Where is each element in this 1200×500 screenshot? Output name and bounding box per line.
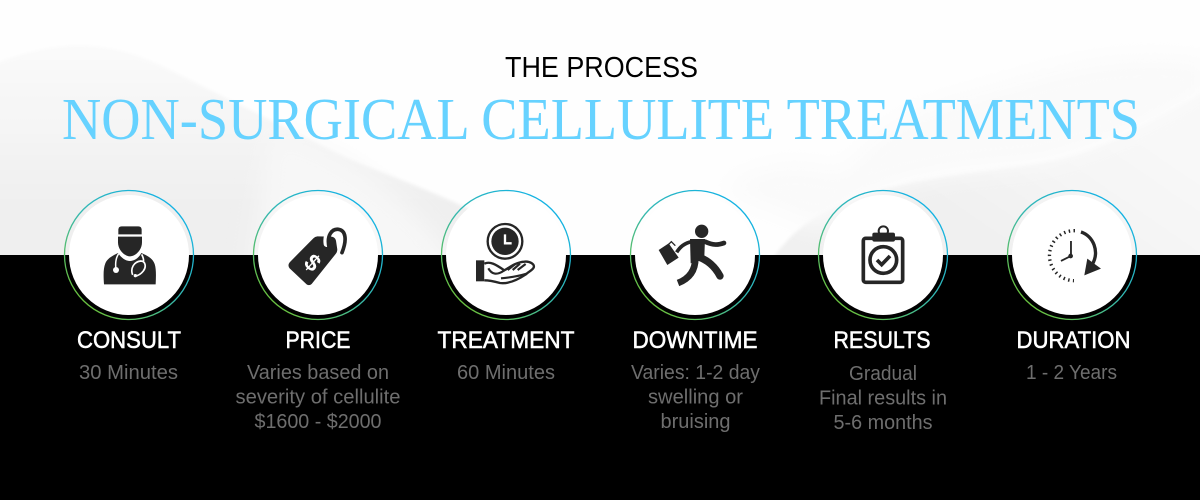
- text: downtime detail: bruising: [660, 411, 730, 433]
- icon: clock with arrow: [1049, 231, 1101, 281]
- step: duration: [1008, 190, 1136, 384]
- heading: results: RESULTS: [834, 327, 930, 354]
- heading: consult: CONSULT: [77, 327, 181, 354]
- icon: clock over hand: [476, 224, 534, 283]
- text: results detail: 5-6 months: [834, 412, 932, 434]
- text: results detail: Gradual: [849, 363, 917, 385]
- background: white silk texture: [0, 0, 1200, 280]
- text: downtime detail: swelling or: [648, 386, 743, 408]
- black lower band: [0, 255, 1200, 500]
- icon: clipboard with check: [863, 226, 903, 282]
- title: non-surgical cellulite treatments: NON-SURGICAL CELLULITE TREATMENTS: [62, 86, 1140, 152]
- step: price: [236, 190, 400, 433]
- text: downtime detail: [631, 362, 760, 433]
- text: duration detail: 1 - 2 Years: [1026, 362, 1117, 384]
- heading: price: PRICE: [286, 327, 350, 354]
- consult badge circle: [64, 190, 194, 320]
- text: price detail: $1600 - $2000: [254, 411, 382, 433]
- results badge circle: [818, 190, 948, 320]
- icon: running businessman: [659, 225, 724, 283]
- price badge circle: [254, 190, 382, 320]
- text: price detail: Varies based on: [247, 362, 389, 384]
- downtime badge circle: [630, 190, 760, 320]
- text: consult detail: 30 Minutes: [79, 362, 178, 384]
- heading: duration: DURATION: [1016, 327, 1130, 354]
- text: results detail: Final results in: [819, 388, 947, 410]
- heading: treatment: TREATMENT: [438, 327, 575, 354]
- treatment badge circle: [442, 190, 570, 320]
- icon: price tag: $: [299, 249, 326, 277]
- text: results detail: [819, 363, 947, 434]
- text: price detail: [236, 362, 400, 433]
- heading: the process: THE PROCESS: [505, 52, 698, 84]
- text: downtime detail: Varies: 1-2 day: [631, 362, 760, 384]
- step: treatment: [438, 190, 575, 384]
- step: downtime: [630, 190, 760, 433]
- text: price detail: severity of cellulite: [236, 386, 400, 408]
- duration badge circle: [1008, 190, 1136, 320]
- text: treatment detail: 60 Minutes: [457, 362, 555, 384]
- step: consult: [64, 190, 194, 384]
- heading: downtime: DOWNTIME: [632, 327, 758, 354]
- icon: price tag: [288, 229, 345, 285]
- icon: doctor: [104, 226, 156, 284]
- step: results: [818, 190, 948, 434]
